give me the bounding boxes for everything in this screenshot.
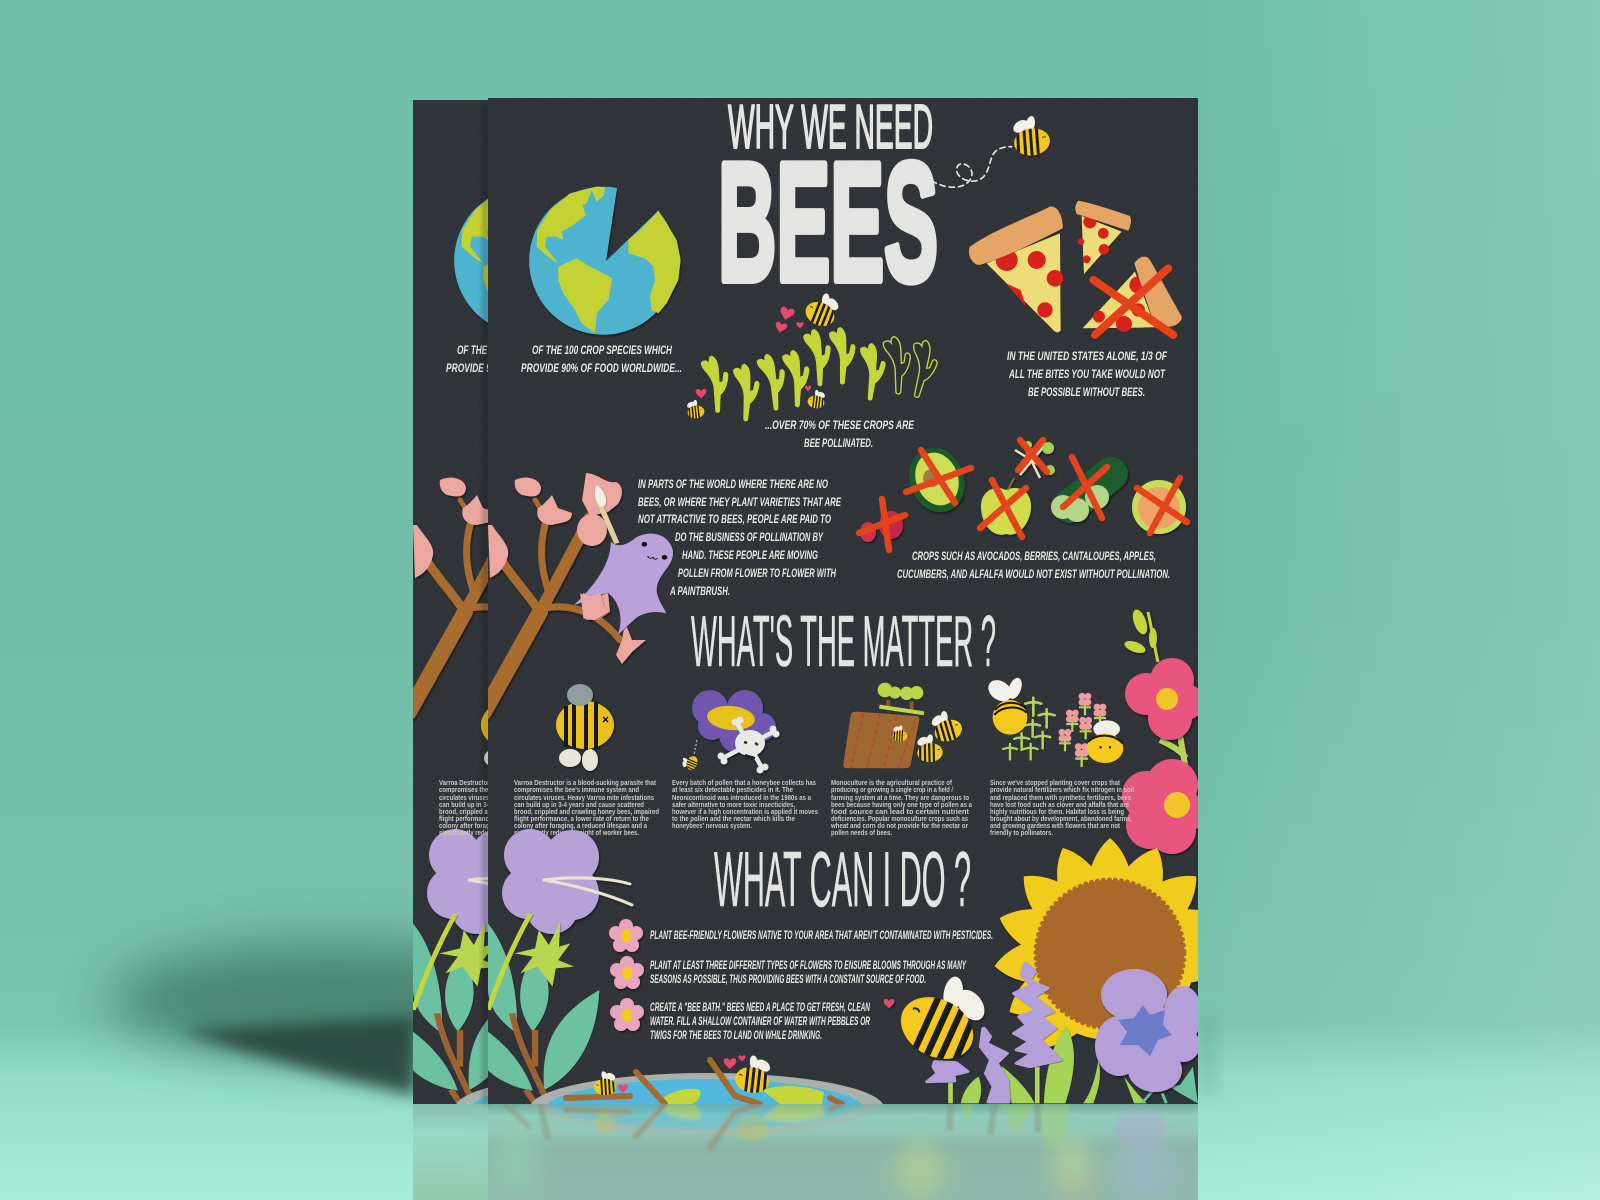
icon: bees at pond [594, 1055, 770, 1096]
caption: 100 crop species: PROVIDE 90% OF FOOD WORLDWIDE... [521, 361, 682, 375]
text: hand pollination [638, 477, 842, 598]
text: pesticides: at least six detectable pesticides in it. The [672, 787, 793, 794]
text: what can I do list: CREATE A "BEE BATH." BEES NEED A PLACE TO GET FRESH, CLEAN [650, 1000, 870, 1014]
text: pesticides: Every batch of pollen that a honeybee collects has [672, 780, 816, 787]
icon: falling bee [682, 740, 698, 770]
character: lilac ghost with paintbrush [574, 485, 673, 635]
caption: 70 percent: BEE POLLINATED. [804, 436, 873, 450]
text: varroa destructor: Varroa Destructor is a blood-sucking parasite that [514, 780, 657, 787]
text: monoculture: deficiencies. Popular monoculture crops such as [831, 816, 968, 823]
text: habitat loss: Since we've stopped planting cover crops that [990, 780, 1121, 787]
text: hand pollination: HAND. THESE PEOPLE ARE MOVING [682, 548, 818, 562]
icon: list flowers [609, 919, 644, 1031]
text: pesticides: Neonicontinoid was introduced in the 1980s as a [672, 795, 811, 802]
caption: 70 percent [765, 420, 914, 447]
text: varroa destructor: circulates viruses. Heavy Varroa mite infestations [514, 795, 654, 802]
text: habitat loss: brought about by development, abandoned farms, [990, 816, 1132, 823]
back poster: compromises the bee's immune system and [439, 787, 564, 794]
caption: one third of bites: IN THE UNITED STATES ALONE, 1/3 OF [1007, 349, 1167, 363]
text: pesticides: honeybees' nervous system. [672, 823, 752, 830]
icon: big bee [884, 960, 999, 1073]
text: hand pollination: BEES, OR WHERE THEY PLANT VARIETIES THAT ARE [638, 495, 842, 509]
text: varroa destructor: brood, crippled and crawling honey bees, impaired [514, 809, 659, 816]
caption: crops list: CROPS SUCH AS AVOCADOS, BERRIES, CANTALOUPES, APPLES, [912, 549, 1156, 563]
front poster: WHAT CAN I DO ? [714, 835, 971, 923]
front poster: WHAT'S THE MATTER ? [691, 602, 996, 682]
text: pesticides: however if a high concentration is applied it moves [672, 809, 818, 816]
text: what can I do list [650, 928, 993, 1042]
caption: 100 crop species [521, 346, 682, 372]
text: habitat loss: friendly to pollinators. [990, 830, 1053, 837]
text: what can I do list: TWIGS FOR THE BEES TO LAND ON WHILE DRINKING. [650, 1028, 822, 1042]
icon: varroa mite on bee [556, 684, 614, 771]
illustration: blossom tree [484, 473, 646, 712]
illustration: bottom plants [951, 1026, 1198, 1103]
back poster: colony after foraging, a reduced lifespan and a [439, 823, 572, 830]
text: monoculture: wheat and corn do not provide for the nectar or [830, 823, 968, 830]
text: hand pollination: A PAINTBRUSH. [669, 584, 730, 598]
illustration: purple flower [1095, 969, 1202, 1092]
back poster: circulates viruses. Heavy Varroa mite infestations [439, 795, 579, 802]
text: varroa destructor: compromises the bee's immune system and [514, 787, 639, 794]
text: varroa destructor: can build up in 3-4 years and cause scattered [514, 802, 644, 809]
text: varroa destructor: colony after foraging, a reduced lifespan and a [514, 823, 647, 830]
caption: crops list [897, 552, 1170, 580]
text: hand pollination: POLLEN FROM FLOWER TO FLOWER WITH [678, 566, 836, 580]
icon: crossed-out crops [859, 440, 1187, 550]
poster cast shadow [110, 942, 1218, 1096]
back poster: OF THE 100 CROP SPECIES WHICH [457, 343, 597, 357]
back poster: flight performance, a lower rate of return to the [439, 816, 574, 823]
front poster: BEES [718, 128, 938, 316]
illustration: pink flower top [1125, 658, 1204, 740]
text: monoculture: Monoculture is the agricultural practice of [831, 780, 953, 787]
text: what can I do list: PLANT AT LEAST THREE DIFFERENT TYPES OF FLOWERS TO ENSURE BLOOMS THROUGH AS MANY [650, 958, 967, 972]
text: pesticides: safer alternative to more toxic insecticides, [672, 802, 795, 809]
flower stems and sprig [1123, 608, 1186, 765]
icon: hearts and small bees around crops [685, 287, 844, 420]
cactus crop row [701, 326, 942, 422]
caption: 70 percent: ...OVER 70% OF THESE CROPS ARE [765, 418, 915, 432]
text: habitat loss: highly nutritious for them. Habitat loss is being [990, 809, 1124, 816]
text: monoculture: pollen needs of bees. [831, 830, 892, 837]
icon: monoculture field and bees [843, 683, 965, 768]
back poster [413, 100, 488, 1104]
caption: crops list: CUCUMBERS, AND ALFALFA WOULD NOT EXIST WITHOUT POLLINATION. [897, 567, 1170, 581]
text: hand pollination: DO THE BUSINESS OF POLLINATION BY [675, 530, 824, 544]
text: habitat loss: have lost food such as clover and alfalfa that are [990, 802, 1129, 809]
icon: habitat loss bees and plants [984, 676, 1123, 767]
text: varroa destructor: flight performance, a lower rate of return to the [514, 816, 649, 823]
caption: one third of bites [1007, 349, 1167, 399]
text: hand pollination: IN PARTS OF THE WORLD WHERE THERE ARE NO [638, 477, 828, 491]
text: what can I do list: WATER. FILL A SHALLOW CONTAINER OF WATER WITH PEBBLES OR [650, 1014, 870, 1028]
back poster: can build up in 3-4 years and cause scattered [439, 802, 569, 809]
text: what can I do list: PLANT BEE-FRIENDLY FLOWERS NATIVE TO YOUR AREA THAT AREN'T CONTAMINATED WITH PESTICIDES. [650, 928, 993, 942]
text: pesticides [672, 780, 818, 830]
text: monoculture [830, 780, 972, 837]
back poster: Varroa Destructor is a blood-sucking parasite that [439, 780, 582, 787]
dashed bee flight path [932, 147, 1012, 187]
icon: flying bee [1013, 116, 1052, 158]
illustration: lavender stalks [928, 963, 1060, 1102]
text: what can I do list: SEASONS AS POSSIBLE, THUS PROVIDING BEES WITH A CONSTANT SOURCE OF FOOD. [650, 972, 926, 986]
illustration: sunflower [994, 838, 1198, 1048]
text: monoculture: food source can lead to certain nutrient [831, 809, 970, 816]
back poster: PROVIDE 90% OF FOOD WORLDWIDE... [446, 361, 607, 375]
text: hand pollination: NOT ATTRACTIVE TO BEES, PEOPLE ARE PAID TO [638, 512, 831, 526]
text: habitat loss [990, 780, 1134, 837]
back poster: brood, crippled and crawling honey bees, impaired [439, 809, 584, 816]
text: varroa destructor [514, 780, 659, 837]
illustration: pink flower bottom [1122, 759, 1208, 854]
icon: pizza slices [969, 201, 1182, 335]
text: varroa destructor: significantly reduced weight of worker bees. [514, 830, 639, 837]
text: habitat loss: and growing gardens with flowers that are not [990, 823, 1121, 830]
text: pesticides: to the pollen and the nectar which kills the [672, 816, 795, 823]
icon: globe with missing wedge [529, 187, 681, 335]
text: monoculture: farming system at a time. They are dangerous to [831, 795, 969, 802]
text: monoculture: producing or growing a single crop in a field / [831, 787, 953, 794]
caption: 100 crop species: OF THE 100 CROP SPECIES WHICH [532, 343, 672, 357]
caption: one third of bites: BE POSSIBLE WITHOUT BEES. [1028, 385, 1145, 399]
illustration: lilac flower with pistils [502, 829, 632, 934]
front poster: WHY WE NEED [728, 93, 933, 162]
text: habitat loss: and replaced them with synthetic fertilizers, bees [990, 795, 1131, 802]
reflection [413, 1104, 1198, 1200]
back poster: significantly reduced weight of worker bees. [439, 830, 564, 837]
text: habitat loss: provide natural fertilizers which fix nitrogen in soil [990, 787, 1134, 794]
illustration: bee bath pond [530, 1060, 884, 1143]
caption: one third of bites: ALL THE BITES YOU TAKE WOULD NOT [1008, 367, 1166, 381]
front poster [483, 93, 1228, 1143]
text: monoculture: bees because having only one type of pollen as a [831, 802, 972, 809]
icon: pesticide flower and skull [692, 690, 780, 774]
illustration: leaves and stems [488, 914, 599, 1103]
